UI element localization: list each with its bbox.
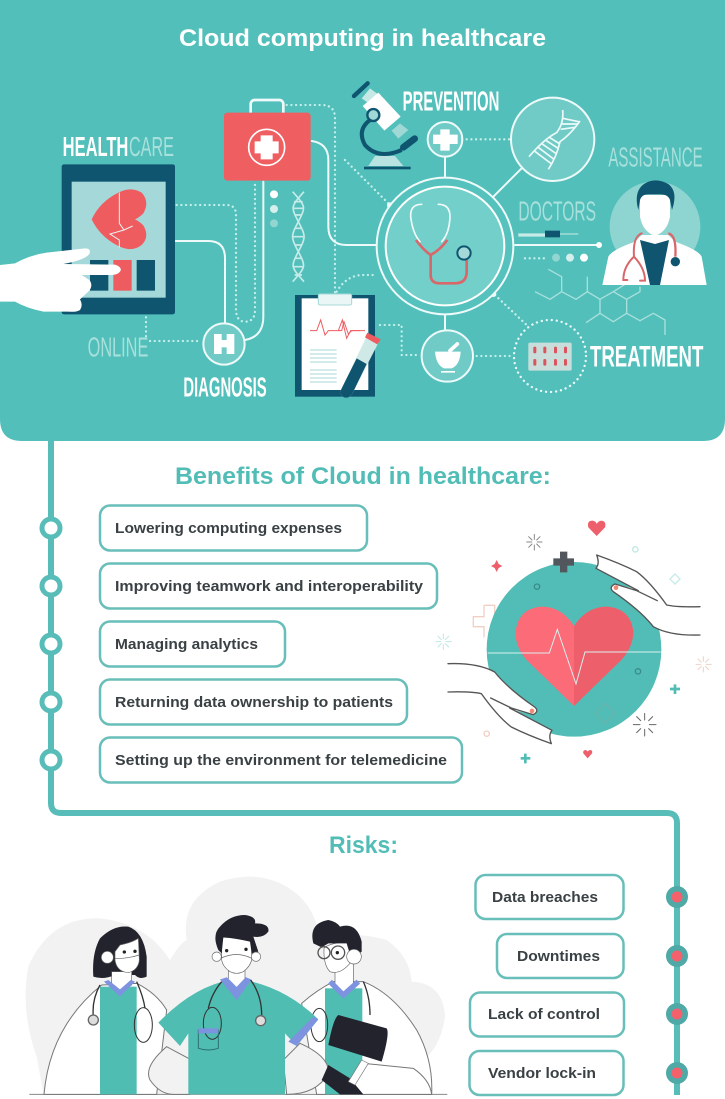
- icon: first aid kit: [224, 100, 311, 181]
- benefit 3: Managing analytics: [115, 636, 258, 653]
- title: Cloud computing in healthcare: [179, 25, 546, 52]
- nurse center: [149, 915, 328, 1094]
- label: PREVENTION: PREVENTION: [403, 86, 499, 117]
- list: benefits: [42, 506, 462, 782]
- doctor left: [44, 926, 167, 1094]
- benefit 4: [42, 680, 407, 724]
- icon: pills blister: [514, 320, 586, 392]
- label: HEALTHCARE: CARE: [129, 131, 174, 162]
- label: HEALTHCARE: HEALTH: [63, 131, 128, 162]
- ground line: [29, 1093, 447, 1096]
- icon: doctor portrait: [602, 180, 707, 285]
- icon: progress dots: [270, 190, 278, 227]
- risk 2: Downtimes: [517, 948, 600, 965]
- icon: clipboard: [295, 294, 375, 397]
- benefit 2: Improving teamwork and interoperability: [115, 578, 424, 595]
- panel: header banner: [0, 0, 725, 441]
- decorative pale cross: [473, 605, 495, 637]
- connector lines right: [380, 139, 602, 356]
- hand lower left: [448, 664, 552, 744]
- background cloud: [26, 877, 445, 1093]
- icon: tablet with heart: [62, 164, 175, 314]
- list: risks: [470, 875, 688, 1095]
- risk 1: [476, 875, 688, 919]
- doctor right: [302, 920, 432, 1094]
- icon: molecule: [535, 269, 665, 335]
- risk 3: Lack of control: [488, 1006, 600, 1023]
- heading: benefits: Benefits of Cloud in healthcare:: [175, 463, 551, 490]
- benefit 3: [42, 622, 285, 666]
- icon: dna circle: [511, 98, 594, 181]
- icon: central stethoscope badge: [377, 178, 513, 314]
- icon: dna strand: [293, 192, 304, 282]
- icon: microscope: [354, 83, 415, 169]
- benefit 1: [42, 506, 367, 550]
- clipboard and arm: [322, 1015, 432, 1094]
- label: DOCTORS: DOCTORS: [518, 196, 596, 227]
- icon: mortar and pestle: [422, 330, 473, 382]
- benefit 2: [42, 564, 437, 608]
- illustration: left half of healthcare network: [0, 100, 390, 403]
- illustration: right half of healthcare network: [338, 83, 707, 398]
- ecg line: [488, 629, 661, 684]
- risk 1: Data breaches: [492, 889, 598, 906]
- label: DIAGNOSIS: DIAGNOSIS: [183, 372, 267, 403]
- icon: test tube: [338, 322, 381, 398]
- small plus and ring marks: [484, 547, 680, 763]
- benefit 1: Lowering computing expenses: [115, 520, 342, 537]
- risk 2: [497, 934, 688, 978]
- heading: risks: Risks:: [329, 832, 398, 859]
- icon: hospital H: [203, 323, 245, 365]
- benefit 4: Returning data ownership to patients: [115, 694, 393, 711]
- risk 4: Vendor lock-in: [488, 1065, 596, 1082]
- risk 4: [470, 1051, 688, 1095]
- heart: [516, 607, 633, 706]
- benefit 5: Setting up the environment for telemedicine: [115, 752, 447, 769]
- icon: pointing hand: [0, 248, 121, 312]
- timeline connector: [51, 441, 677, 1095]
- illustration: medical team: [26, 877, 447, 1094]
- hand upper right: [596, 555, 700, 635]
- globe: [487, 562, 661, 737]
- icon: plus circle: [428, 122, 462, 157]
- illustration: hands holding heart globe: [436, 521, 711, 763]
- dark plus: [553, 552, 574, 572]
- label: ONLINE: ONLINE: [88, 332, 148, 363]
- small hearts: [491, 521, 605, 758]
- sparkles: [436, 534, 711, 736]
- connector lines left: [146, 105, 390, 341]
- icon: syringe: [518, 231, 578, 237]
- benefit 5: [42, 738, 462, 782]
- icon: dots row: [525, 254, 588, 262]
- risk 3: [470, 992, 688, 1036]
